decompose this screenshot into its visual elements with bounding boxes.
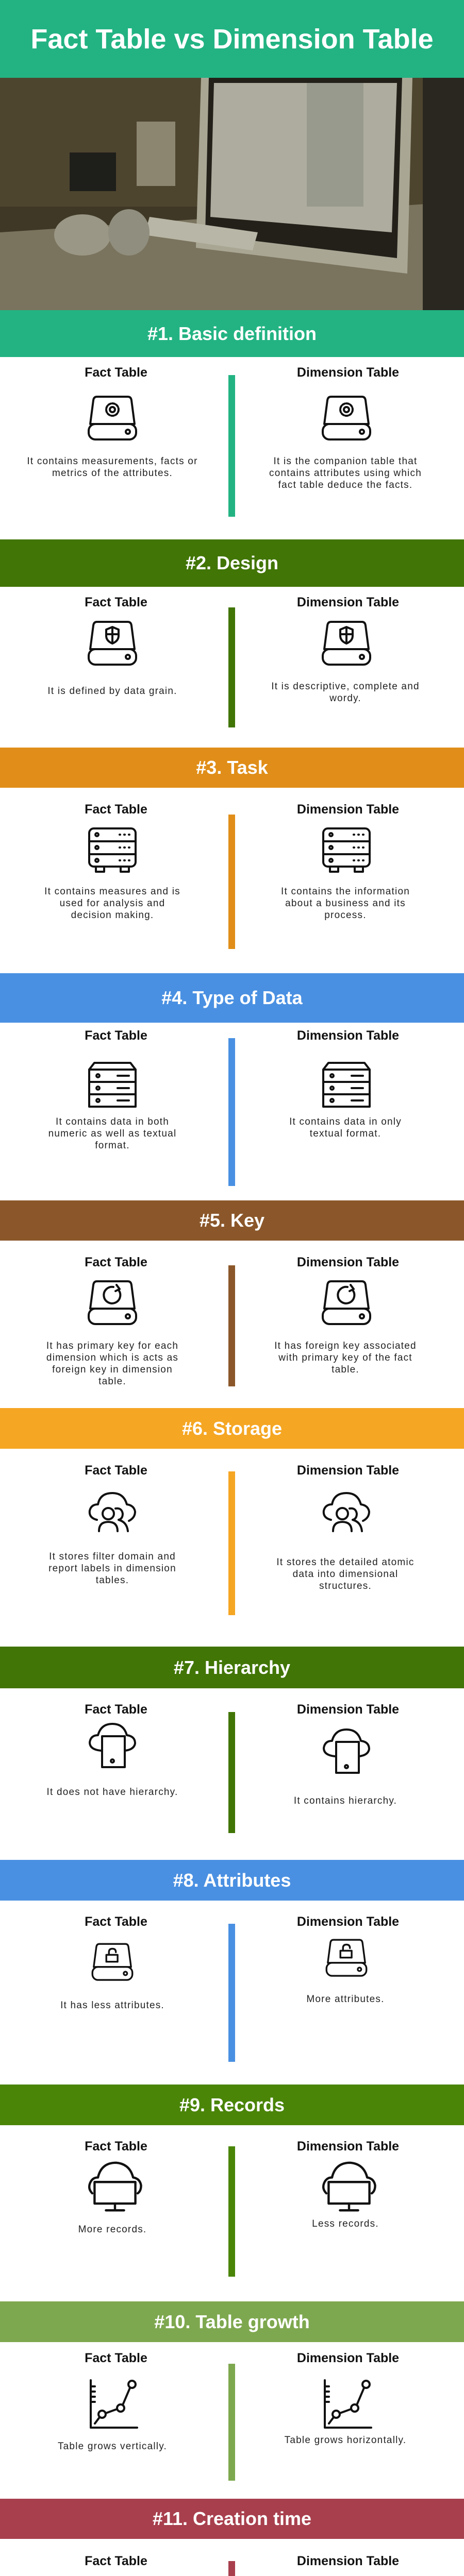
section 4 content bbox=[48, 1028, 402, 1186]
text: fact bbox=[48, 1551, 176, 1586]
text: dimension: More attributes. bbox=[306, 1994, 385, 2005]
icon: refresh drive right bbox=[322, 1280, 371, 1325]
section 6 header: #6. Storage bbox=[182, 1418, 282, 1438]
section 10 header bbox=[0, 2301, 464, 2342]
heading: fact: Fact Table bbox=[85, 2351, 147, 2365]
text: fact bbox=[44, 886, 180, 921]
text: dimension: It stores the detailed atomic bbox=[276, 1557, 415, 1568]
section 11 content bbox=[0, 2539, 464, 2576]
text: fact: numeric as well as textual bbox=[48, 1128, 176, 1139]
section 9 header: #9. Records bbox=[179, 2094, 285, 2115]
text: fact: decision making. bbox=[71, 910, 154, 921]
text: dimension: data into dimensional bbox=[293, 1569, 398, 1580]
icon: lock drive bbox=[92, 1943, 133, 1981]
hero photo: desk with computer bbox=[0, 78, 464, 310]
text: fact bbox=[46, 1341, 178, 1387]
section 4 header: #4. Type of Data bbox=[161, 987, 303, 1008]
divider bbox=[228, 375, 235, 517]
text: fact: Table grows vertically. bbox=[58, 2441, 167, 2452]
text: dimension: table. bbox=[332, 1364, 359, 1375]
section 3 header bbox=[0, 748, 464, 788]
section 1 header bbox=[0, 310, 464, 357]
divider bbox=[228, 1471, 235, 1615]
heading: dimension: Dimension Table bbox=[297, 1463, 399, 1478]
section 7 header bbox=[0, 1647, 464, 1688]
text: dimension: It has foreign key associated bbox=[274, 1341, 417, 1351]
heading: fact: Fact Table bbox=[85, 2554, 147, 2568]
section 1 content bbox=[27, 365, 422, 517]
text: dimension: Table grows horizontally. bbox=[285, 2435, 406, 2446]
section 6 header bbox=[0, 1408, 464, 1449]
heading: dimension: Dimension Table bbox=[297, 1255, 399, 1269]
divider bbox=[228, 1712, 235, 1833]
icon: cloud phone right bbox=[323, 1728, 370, 1774]
title band bbox=[0, 0, 464, 78]
divider bbox=[228, 2146, 235, 2277]
section 3 content bbox=[44, 802, 410, 949]
heading: dimension: Dimension Table bbox=[297, 1028, 399, 1043]
divider bbox=[228, 607, 235, 727]
section 9 content bbox=[78, 2139, 399, 2277]
text: fact bbox=[48, 1116, 176, 1151]
section 2 header: #2. Design bbox=[186, 552, 278, 573]
divider bbox=[228, 1038, 235, 1186]
text: fact: It is defined by data grain. bbox=[47, 686, 177, 697]
section 10 header: #10. Table growth bbox=[154, 2311, 310, 2332]
section 1 header: #1. Basic definition bbox=[147, 323, 317, 344]
icon: shield drive bbox=[88, 621, 137, 666]
heading: dimension: Dimension Table bbox=[297, 2351, 399, 2365]
text: dimension: It is descriptive, complete and bbox=[271, 681, 420, 692]
section 4 header bbox=[0, 973, 464, 1023]
text: dimension: It contains data in only bbox=[289, 1116, 402, 1127]
icon: line chart bbox=[87, 2378, 138, 2430]
section 8 header: #8. Attributes bbox=[173, 1869, 291, 1891]
text: fact: tables. bbox=[96, 1575, 129, 1586]
title band: Fact Table vs Dimension Table bbox=[30, 24, 434, 55]
heading: fact: Fact Table bbox=[85, 2139, 147, 2154]
heading: fact: Fact Table bbox=[85, 1702, 147, 1717]
section 9 header bbox=[0, 2084, 464, 2125]
text: dimension: Less records. bbox=[312, 2218, 379, 2229]
heading: dimension: Dimension Table bbox=[297, 802, 399, 817]
text: dimension bbox=[276, 1557, 415, 1591]
heading: dimension: Dimension Table bbox=[297, 2554, 399, 2568]
section 7 header: #7. Hierarchy bbox=[174, 1657, 290, 1677]
text: dimension: It contains the information bbox=[281, 886, 410, 897]
text: fact: It contains measurements, facts or bbox=[27, 456, 198, 467]
heading: fact: Fact Table bbox=[85, 1914, 147, 1929]
heading: dimension: Dimension Table bbox=[297, 2139, 399, 2154]
text: fact: It does not have hierarchy. bbox=[47, 1787, 178, 1798]
divider bbox=[228, 2561, 235, 2576]
text: dimension bbox=[269, 456, 422, 490]
text: dimension bbox=[274, 1341, 417, 1375]
text: fact: It has less attributes. bbox=[60, 2000, 164, 2011]
icon: lock drive right bbox=[326, 1939, 367, 1977]
text: dimension bbox=[271, 681, 420, 704]
section 5 header: #5. Key bbox=[200, 1210, 264, 1231]
text: dimension bbox=[289, 1116, 402, 1139]
heading: dimension: Dimension Table bbox=[297, 365, 399, 380]
text: fact: report labels in dimension bbox=[48, 1563, 176, 1574]
icon: cloud users bbox=[89, 1492, 136, 1532]
icon: cloud monitor right bbox=[322, 2162, 376, 2211]
divider bbox=[228, 1924, 235, 2062]
section 11 header bbox=[0, 2499, 464, 2539]
icon: refresh drive bbox=[88, 1280, 137, 1325]
section 5 content bbox=[46, 1255, 417, 1387]
heading: fact: Fact Table bbox=[85, 1463, 147, 1478]
icon: cloud users right bbox=[323, 1492, 370, 1532]
section 6 content bbox=[48, 1463, 415, 1615]
text: fact: It stores filter domain and bbox=[49, 1551, 176, 1562]
text: dimension: textual format. bbox=[310, 1128, 381, 1139]
text: fact: It contains measures and is bbox=[44, 886, 180, 897]
heading: dimension: Dimension Table bbox=[297, 595, 399, 609]
icon: shield drive right bbox=[322, 621, 371, 666]
icon: cloud phone bbox=[89, 1723, 136, 1768]
text: fact: It has primary key for each bbox=[46, 1341, 178, 1351]
text: fact: metrics of the attributes. bbox=[52, 468, 173, 479]
text: dimension: contains attributes using which bbox=[269, 468, 422, 479]
section 2 header bbox=[0, 539, 464, 587]
text: fact: format. bbox=[95, 1140, 130, 1151]
icon: storage rack bbox=[88, 1062, 137, 1108]
text: fact: More records. bbox=[78, 2224, 146, 2235]
text: dimension bbox=[281, 886, 410, 921]
section 5 header bbox=[0, 1200, 464, 1241]
text: fact: used for analysis and bbox=[60, 898, 165, 909]
text: dimension: It contains hierarchy. bbox=[294, 1795, 397, 1806]
text: dimension: about a business and its bbox=[285, 898, 406, 909]
section 2 content bbox=[47, 595, 420, 727]
text: fact: It contains data in both bbox=[56, 1116, 169, 1127]
text: dimension: structures. bbox=[319, 1581, 372, 1591]
section 11 header: #11. Creation time bbox=[153, 2508, 311, 2529]
heading: fact: Fact Table bbox=[85, 802, 147, 817]
section 8 header bbox=[0, 1860, 464, 1901]
section 7 content bbox=[47, 1702, 399, 1833]
divider bbox=[228, 1265, 235, 1386]
icon: storage rack right bbox=[322, 1062, 371, 1108]
text: dimension: with primary key of the fact bbox=[278, 1352, 412, 1363]
icon: cloud monitor bbox=[88, 2162, 142, 2211]
heading: fact: Fact Table bbox=[85, 1255, 147, 1269]
icon: line chart right bbox=[321, 2378, 372, 2430]
text: dimension: It is the companion table that bbox=[274, 456, 417, 467]
text: fact bbox=[27, 456, 198, 479]
text: fact: table. bbox=[98, 1376, 126, 1387]
icon: gear drive right bbox=[322, 396, 371, 440]
heading: fact: Fact Table bbox=[85, 595, 147, 609]
text: fact: dimension which is acts as bbox=[46, 1352, 178, 1363]
icon: server bbox=[88, 827, 137, 873]
text: dimension: wordy. bbox=[329, 693, 361, 704]
divider bbox=[228, 2364, 235, 2481]
heading: fact: Fact Table bbox=[85, 365, 147, 380]
text: dimension: process. bbox=[324, 910, 367, 921]
divider bbox=[228, 815, 235, 949]
heading: fact: Fact Table bbox=[85, 1028, 147, 1043]
icon: server right bbox=[322, 827, 371, 873]
text: dimension: fact table deduce the facts. bbox=[278, 480, 412, 490]
section 3 header: #3. Task bbox=[196, 757, 268, 778]
section 8 content bbox=[60, 1914, 399, 2062]
heading: dimension: Dimension Table bbox=[297, 1702, 399, 1717]
icon: gear drive bbox=[88, 396, 137, 440]
text: fact: foreign key in dimension bbox=[52, 1364, 173, 1375]
section 10 content bbox=[58, 2351, 406, 2481]
heading: dimension: Dimension Table bbox=[297, 1914, 399, 1929]
